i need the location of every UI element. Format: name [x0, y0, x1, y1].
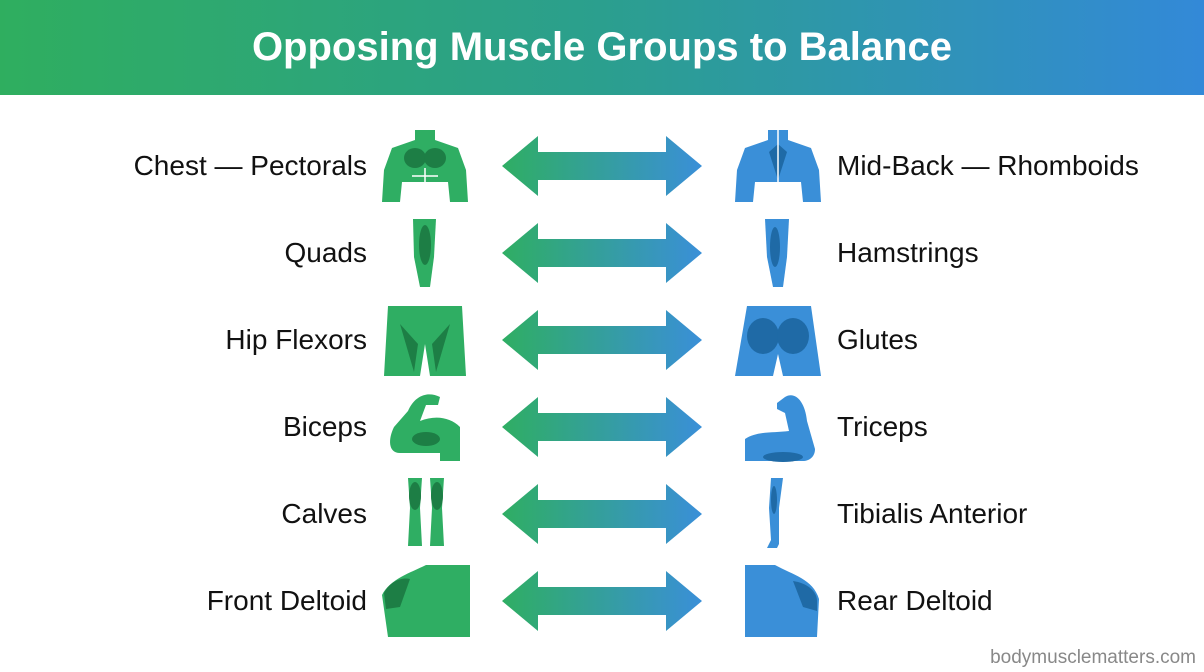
icon: biceps: [390, 394, 460, 461]
row 4: Biceps: [283, 411, 367, 442]
icon: front deltoid: [382, 565, 470, 637]
row 3: Hip Flexors: [225, 324, 367, 355]
icon: hamstrings: [765, 219, 789, 287]
arrow: [502, 136, 702, 196]
row 1: Chest — Pectorals: [134, 150, 367, 181]
text: Glutes: [837, 324, 918, 355]
text: Triceps: [837, 411, 928, 442]
text: Mid-Back — Rhomboids: [837, 150, 1139, 181]
icon: glutes: [735, 306, 821, 376]
row 5: Calves: [281, 498, 367, 529]
text: Hamstrings: [837, 237, 979, 268]
text: Tibialis Anterior: [837, 498, 1027, 529]
header: [0, 0, 1204, 95]
row 2: Quads: [284, 237, 367, 268]
icon: calves: [408, 478, 444, 546]
arrow: [502, 571, 702, 631]
icon: chest: [382, 130, 468, 202]
icon: mid-back: [735, 130, 821, 202]
arrow: [502, 223, 702, 283]
arrow: [502, 397, 702, 457]
footer: bodymusclematters.com: [990, 647, 1196, 668]
icon: rear deltoid: [745, 565, 819, 637]
arrow: [502, 484, 702, 544]
icon: hip flexors: [384, 306, 466, 376]
row 6: Front Deltoid: [207, 585, 367, 616]
icon: quads: [413, 219, 436, 287]
icon: triceps: [745, 395, 815, 462]
arrow: [502, 310, 702, 370]
icon: tibialis: [767, 478, 783, 548]
text: Rear Deltoid: [837, 585, 993, 616]
header: Opposing Muscle Groups to Balance: [252, 25, 952, 69]
